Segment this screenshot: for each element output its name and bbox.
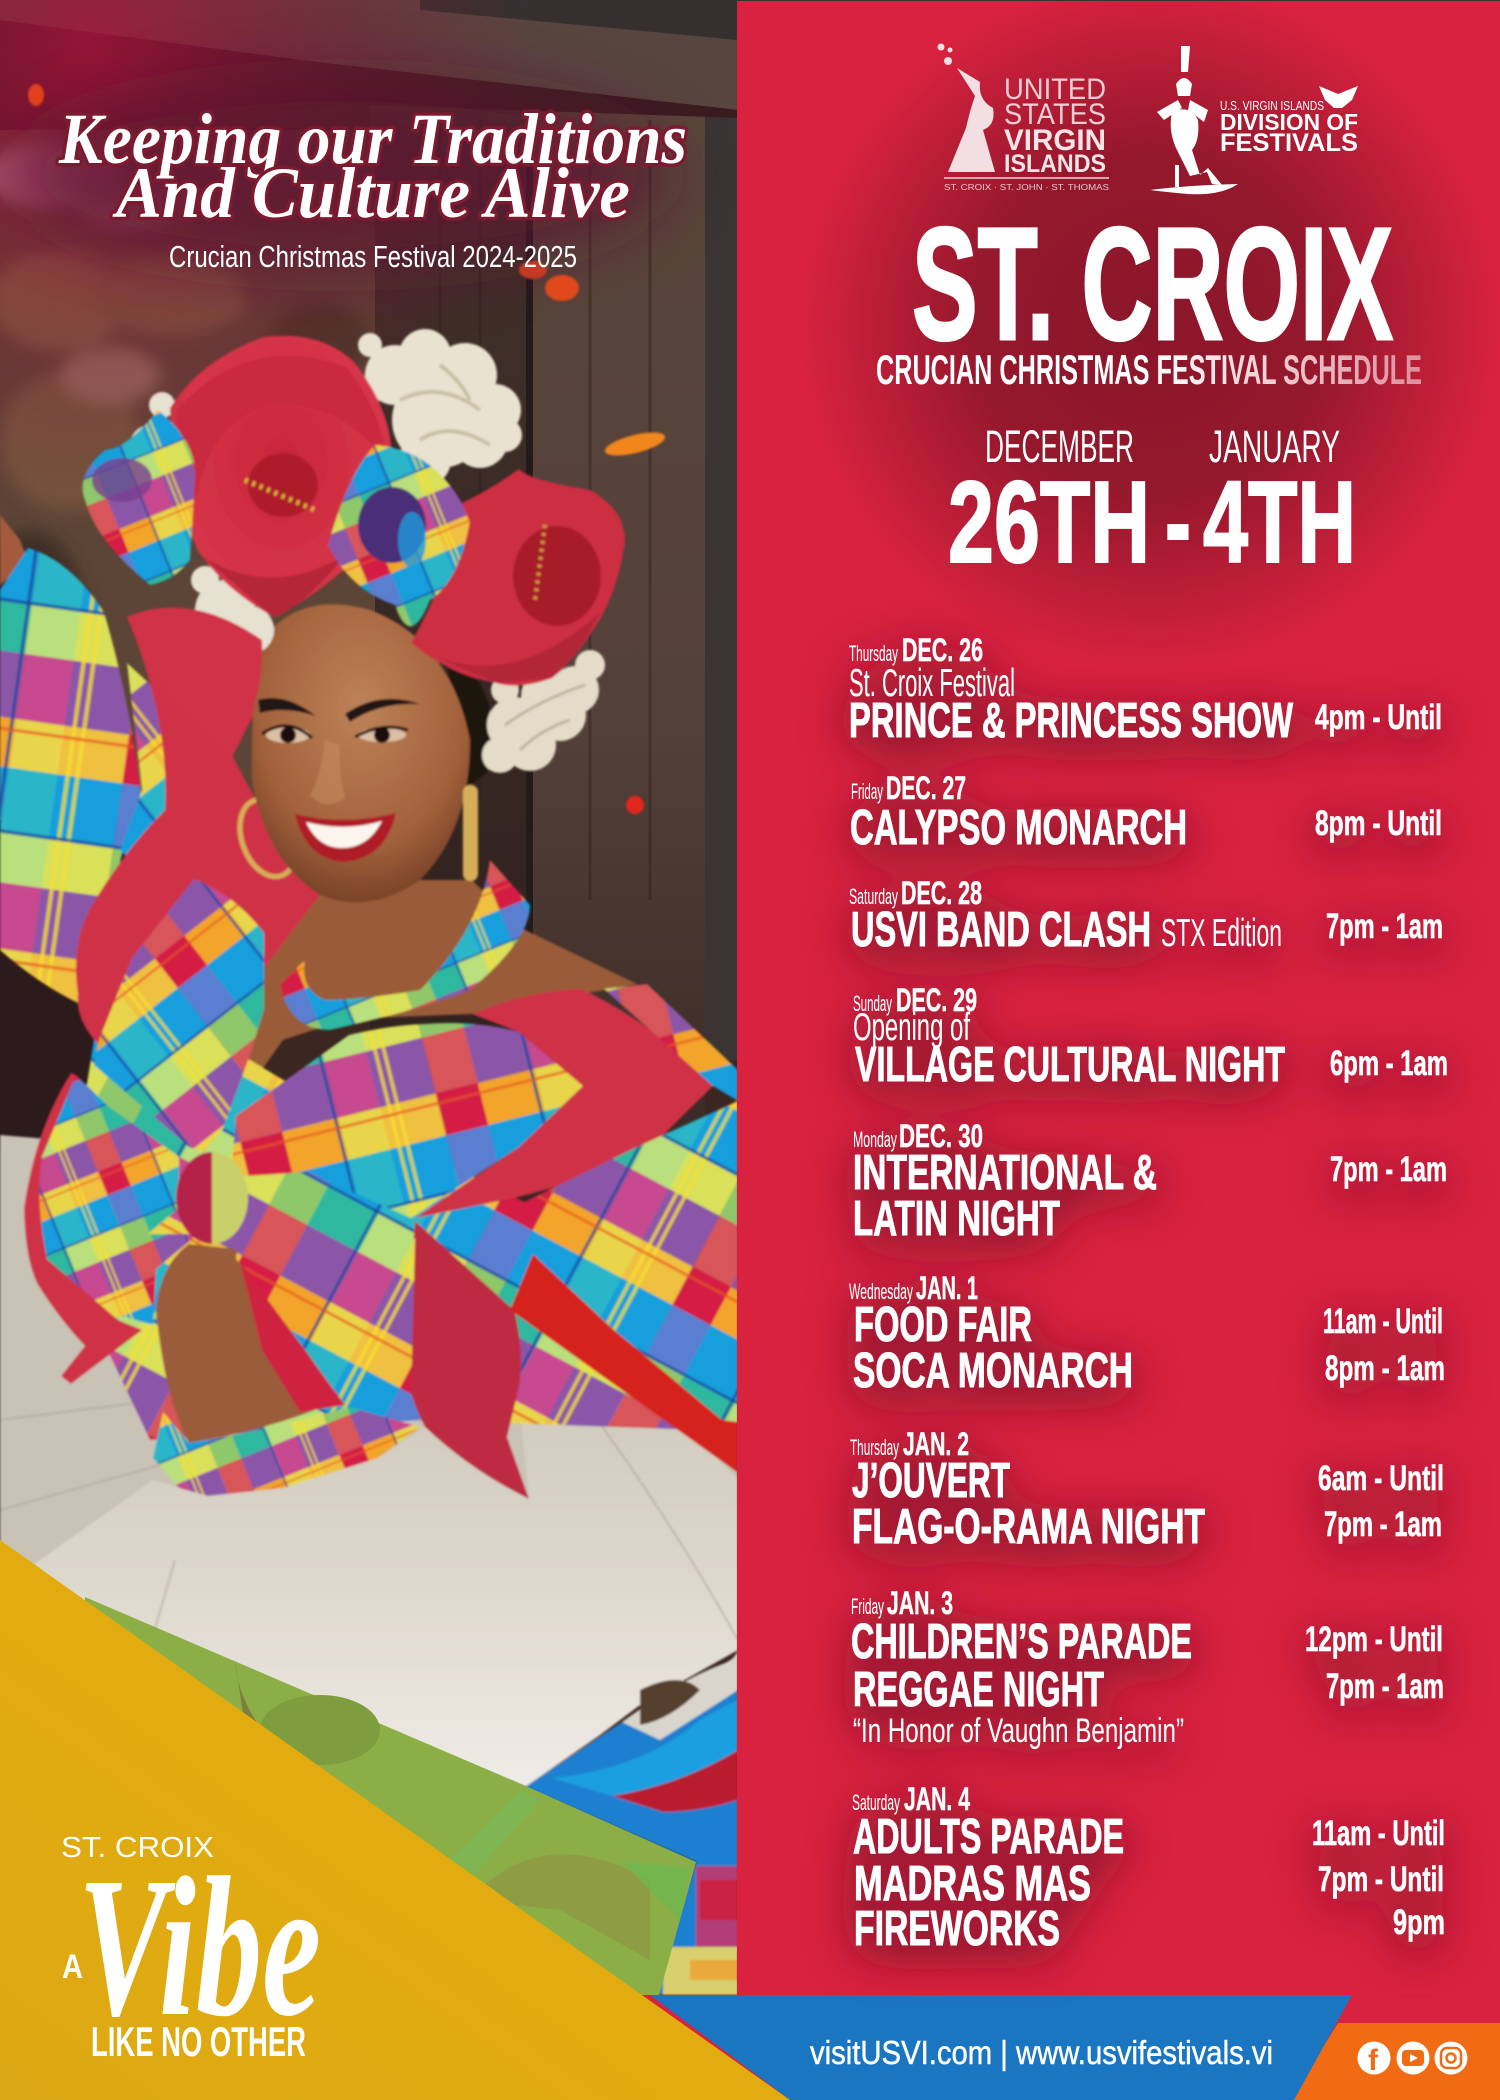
title: Keeping our Traditions — [58, 99, 687, 233]
yellow corner triangle — [0, 1540, 790, 2100]
face — [230, 604, 493, 902]
neck scarf — [280, 860, 530, 1030]
event: Jan 1: FOOD FAIR — [854, 1298, 1032, 1352]
event: Jan 3: CHILDREN’S PARADE — [851, 1615, 1192, 1669]
icon: dancer figure — [938, 44, 995, 172]
madras underlayer — [85, 1038, 678, 1442]
icon: youtube — [1396, 2042, 1430, 2074]
event: Dec 30: Monday — [853, 1127, 897, 1152]
event: Jan 2: FLAG-O-RAMA NIGHT — [852, 1500, 1205, 1554]
logo: United States Virgin Islands: ST. CROIX · ST. JOHN · ST. THOMAS — [944, 183, 1109, 192]
logo: St. Croix a Vibe Like No Other: LIKE NO OTHER — [91, 2018, 306, 2065]
event: Jan 4 — [852, 1781, 1445, 1956]
date range: 4TH — [1203, 457, 1356, 587]
event: Jan 3 — [851, 1585, 1444, 1750]
right earring — [463, 785, 478, 881]
skirt — [0, 1135, 738, 1787]
event: Dec 28: 7pm - 1am — [1326, 907, 1443, 946]
event: Jan 4: Saturday — [852, 1790, 900, 1815]
logo: St. Croix a Vibe Like No Other: A — [62, 1948, 83, 1986]
plaid rose middle — [328, 445, 470, 626]
logo: Division of Festivals: DIVISION OF — [1220, 109, 1358, 135]
event: Dec 30: DEC. 30 — [899, 1118, 983, 1154]
event: Jan 1 — [849, 1270, 1445, 1398]
logo: United States Virgin Islands: UNITED — [1004, 73, 1106, 106]
title: Keeping our Traditions: And Culture Alive — [112, 153, 630, 233]
event: Dec 29: Sunday — [853, 991, 892, 1016]
eyes — [266, 727, 310, 743]
logo: St. Croix a Vibe Like No Other: ST. CROIX — [61, 1832, 214, 1864]
plaid rose left — [82, 410, 195, 585]
event: Jan 4: 7pm - Until — [1318, 1860, 1444, 1899]
embers — [28, 84, 667, 814]
logo: Division of Festivals: FESTIVALS — [1220, 129, 1358, 157]
title: Keeping our Traditions: Keeping our Traditions — [58, 99, 687, 179]
icon: instagram — [1434, 2042, 1468, 2074]
event: Jan 1: SOCA MONARCH — [853, 1344, 1133, 1398]
green translucent overlay — [85, 1597, 696, 2010]
event: Jan 3: 7pm - 1am — [1326, 1667, 1444, 1706]
event: Jan 1: Wednesday — [849, 1279, 913, 1304]
skirt fold — [622, 1650, 738, 1741]
event: Jan 3: “In Honor of Vaughn Benjamin” — [853, 1712, 1184, 1750]
event: Dec 26: St. Croix Festival — [849, 662, 1015, 705]
event: Dec 27: DEC. 27 — [886, 770, 966, 806]
date range — [948, 457, 1356, 587]
event: Dec 29 — [853, 982, 1448, 1092]
event: Jan 2: J’OUVERT — [852, 1454, 1010, 1508]
logo: St. Croix a Vibe Like No Other — [61, 1832, 321, 2065]
date range: 26TH — [948, 457, 1150, 587]
event: Dec 28 — [849, 875, 1443, 957]
photo background: wood wall and foliage — [0, 0, 738, 1995]
logo: Division of Festivals: U.S. VIRGIN ISLANDS — [1220, 99, 1324, 113]
date range: - — [1165, 457, 1191, 587]
event: Jan 4: FIREWORKS — [854, 1902, 1060, 1956]
event: Jan 4: ADULTS PARADE — [853, 1810, 1124, 1864]
event: Dec 27: CALYPSO MONARCH — [850, 801, 1187, 855]
logo: United States Virgin Islands — [938, 44, 1109, 192]
logo: United States Virgin Islands: ISLANDS — [1004, 150, 1106, 178]
raised sleeve — [0, 515, 189, 1004]
event: Jan 2 — [850, 1426, 1444, 1554]
event: Dec 28: Saturday — [849, 884, 898, 909]
blue website band — [650, 1995, 1352, 2100]
white flower top right — [358, 329, 522, 486]
schedule list — [849, 632, 1448, 1956]
event: Dec 29: DEC. 29 — [896, 982, 977, 1018]
event: Dec 29: 6pm - 1am — [1330, 1044, 1448, 1083]
red rose top — [170, 336, 392, 618]
eyebrows — [258, 698, 420, 722]
event: Dec 30 — [853, 1118, 1447, 1246]
icon: moko jumbie figure — [1150, 46, 1238, 194]
event: Dec 27 — [850, 770, 1442, 855]
event: Jan 2: Thursday — [850, 1435, 899, 1460]
event: Dec 26: Thursday — [849, 641, 898, 666]
event: Dec 29: Opening of — [853, 1006, 970, 1049]
icon: eagle — [1319, 86, 1358, 108]
event: Jan 4: MADRAS MAS — [854, 1857, 1091, 1911]
event: Jan 4: 9pm — [1393, 1903, 1445, 1942]
event: Dec 28: USVI BAND CLASH — [851, 903, 1151, 957]
event: Dec 27: 8pm - Until — [1315, 804, 1442, 843]
icon: facebook: f — [1368, 2044, 1379, 2077]
month labels: DECEMBER — [985, 421, 1134, 472]
belly — [154, 1242, 317, 1444]
event: Dec 30: 7pm - 1am — [1330, 1150, 1447, 1189]
event: Dec 26 — [849, 632, 1442, 748]
event: Dec 28: STX Edition — [1161, 912, 1282, 955]
logo: St. Croix a Vibe Like No Other: Vibe — [78, 1837, 321, 2058]
event: Jan 1: JAN. 1 — [916, 1270, 978, 1306]
photo panel: woman in madras costume — [0, 0, 738, 2010]
event: Jan 3: Friday — [851, 1594, 884, 1619]
woman figure — [0, 329, 738, 1995]
red rose right — [411, 469, 625, 686]
white flowers left — [123, 392, 274, 654]
event: Dec 26: 4pm - Until — [1315, 698, 1442, 737]
top beam — [0, 0, 738, 110]
event: Jan 4: JAN. 4 — [904, 1781, 970, 1817]
event: Dec 26: DEC. 26 — [902, 632, 983, 668]
lower right plaid fabric — [525, 1680, 738, 1995]
panel: red schedule background — [737, 0, 1500, 2100]
event: Jan 2: 7pm - 1am — [1324, 1505, 1442, 1544]
white flower bottom right — [482, 650, 605, 773]
logo: United States Virgin Islands: VIRGIN — [1004, 124, 1106, 157]
month labels: JANUARY — [1209, 421, 1340, 472]
smile — [295, 813, 396, 862]
logo: United States Virgin Islands: STATES — [1004, 98, 1106, 131]
website links: visitUSVI.com | www.usvifestivals.vi — [810, 2034, 1273, 2071]
red wrap lower left — [127, 608, 262, 757]
event: Jan 3: 12pm - Until — [1305, 1620, 1443, 1659]
event: Dec 26: PRINCE & PRINCESS SHOW — [849, 694, 1293, 748]
event: Jan 1: 8pm - 1am — [1325, 1349, 1445, 1388]
event: Dec 30: INTERNATIONAL & — [853, 1146, 1157, 1200]
event: Jan 2: 6am - Until — [1318, 1459, 1444, 1498]
event: Jan 3: JAN. 3 — [887, 1585, 953, 1621]
madras bow — [39, 879, 583, 1496]
logo: Division of Festivals — [1150, 46, 1358, 194]
event: Jan 2: JAN. 2 — [903, 1426, 969, 1462]
event: Dec 29: VILLAGE CULTURAL NIGHT — [855, 1038, 1285, 1092]
icon: facebook — [1358, 2042, 1390, 2077]
hoop earring — [230, 792, 306, 884]
subtitle: festival years: Crucian Christmas Festival 2024-2025 — [169, 239, 577, 274]
right sleeve plaid — [512, 984, 738, 1422]
headwrap with fabric flowers — [82, 329, 625, 773]
event: Jan 3: REGGAE NIGHT — [853, 1663, 1104, 1717]
icon: orange corner band — [1290, 2023, 1500, 2100]
event: Dec 27: Friday — [851, 779, 883, 804]
red cloth — [24, 617, 738, 1499]
neck and chest — [243, 878, 637, 1069]
event: Dec 30: LATIN NIGHT — [853, 1192, 1060, 1246]
event: Dec 28: DEC. 28 — [901, 875, 982, 911]
